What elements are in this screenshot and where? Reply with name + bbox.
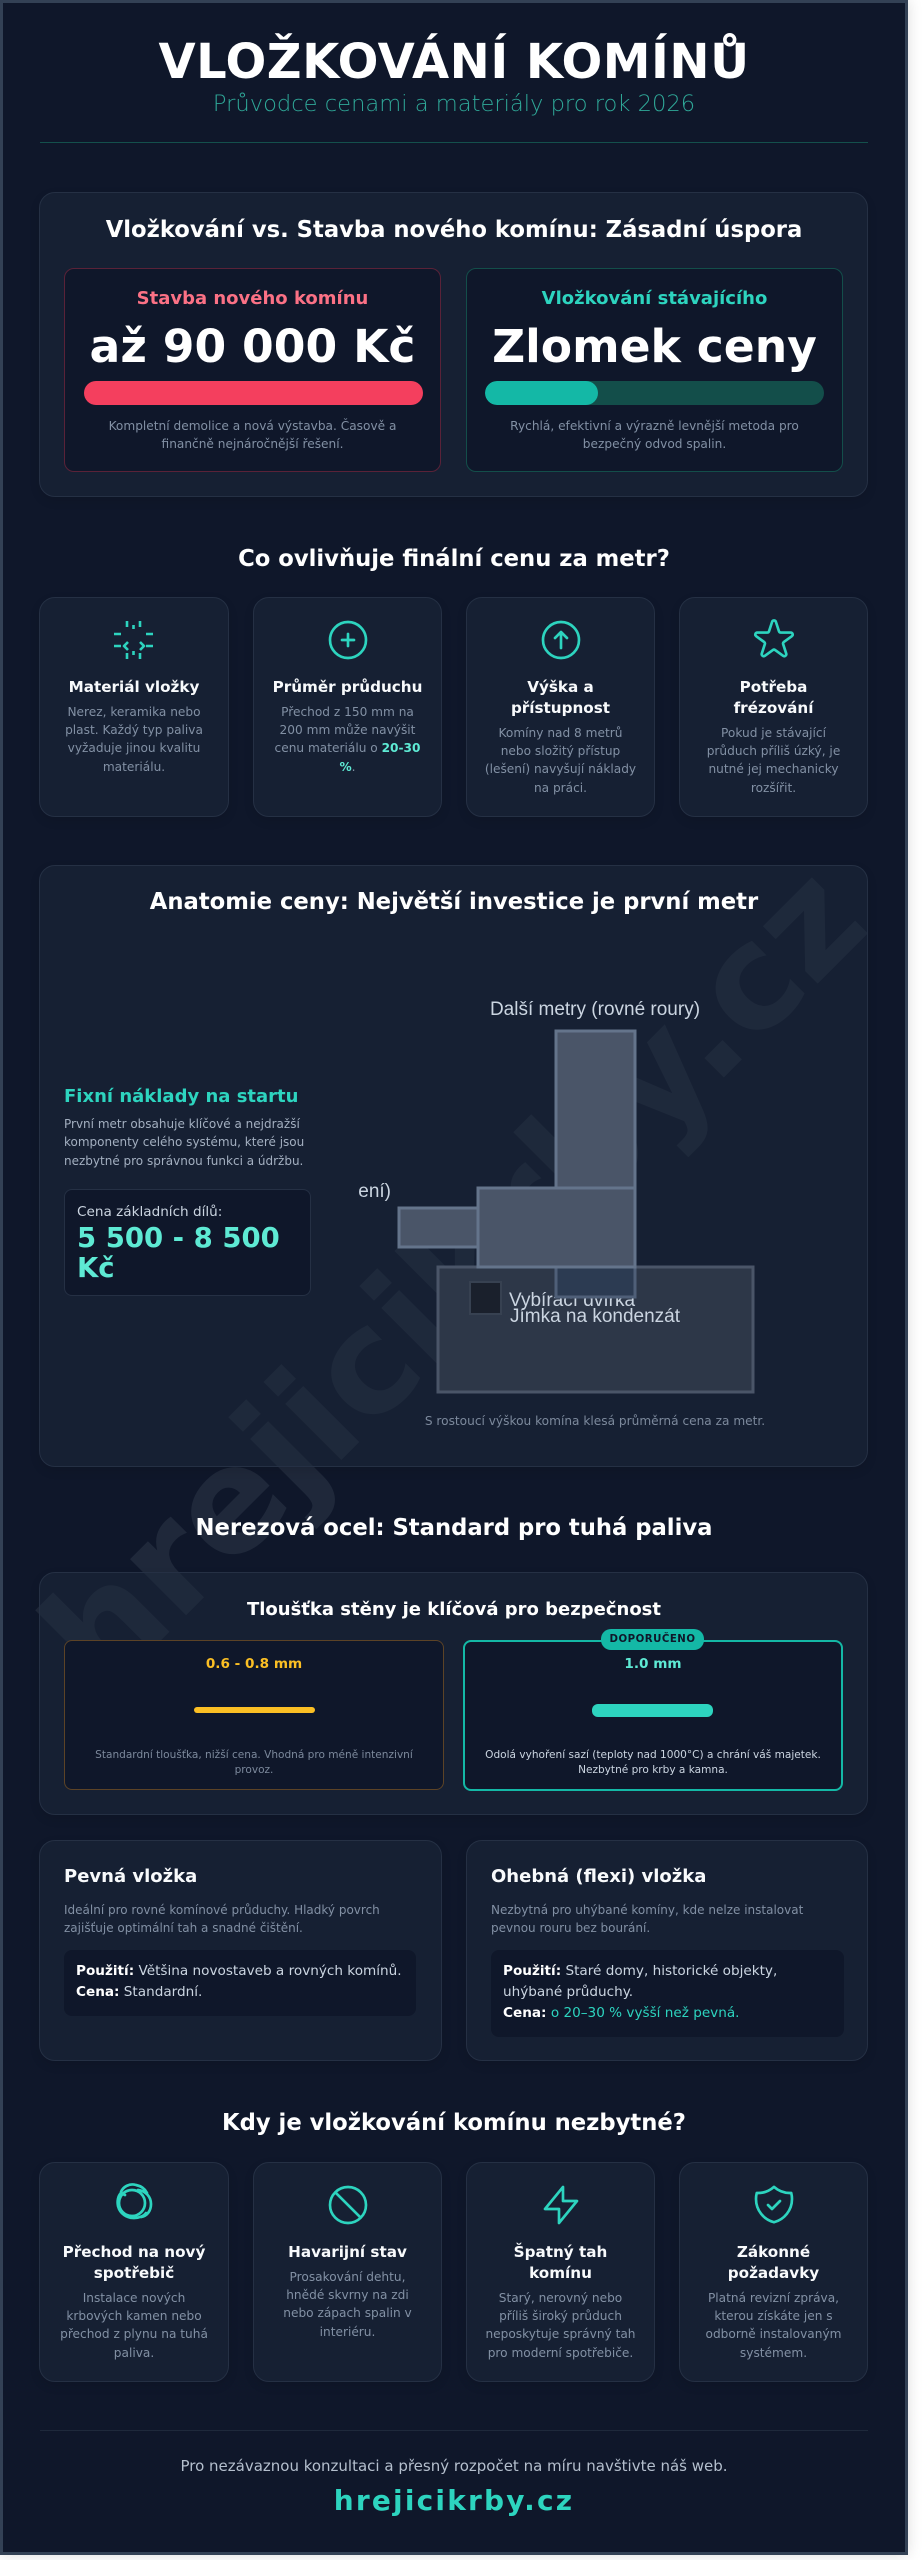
need card: legal [679,2162,868,2382]
thickness heading: Tloušťka stěny je klíčová pro bezpečnost [247,1599,661,1620]
factor card: height [466,597,655,817]
panel: comparison [39,192,868,497]
description [485,726,636,795]
description [283,2270,412,2339]
description: cenu materiálu o 20-30 [275,741,420,755]
card: lining [466,268,843,472]
usage text: Použití: Staré domy, historické objekty, [503,1963,777,1979]
badge: recommended: DOPORUČENO [610,1634,695,1645]
liner title: Pevná vložka [64,1866,197,1887]
thickness bar [194,1707,315,1713]
title [511,678,610,717]
usage text: uhýbané průduchy. [503,1984,633,2000]
description: finančně nejnáročnější řešení. [162,437,343,451]
factor card: diameter [253,597,442,817]
cleaning door [470,1282,501,1314]
title: Zákonné [737,2243,810,2261]
description: %. [339,760,356,774]
description: hnědé skvrny na zdi [286,2288,409,2302]
description [60,2291,208,2360]
description: nebo složitý přístup [501,744,620,758]
description: přechod z plynu na tuhá [60,2327,208,2341]
fixed costs text [64,1117,304,1168]
description: kterou získáte jen s [714,2309,833,2323]
description: Odolá vyhoření sazí (teploty nad 1000°C) a chrání váš majetek. [485,1749,821,1761]
icon: ban [328,2186,368,2224]
description [485,1749,821,1776]
thickness bar [592,1704,713,1717]
description [707,726,840,795]
footer text: Pro nezávaznou konzultaci a přesný rozpočet na míru navštivte náš web. [180,2457,728,2475]
description: průduch příliš úzký, je [707,744,840,758]
description: neposkytuje správný tah [485,2327,636,2341]
price: až 90 000 Kč [90,320,415,373]
title: Potřeba [740,678,807,696]
label: condensate tank: Jímka na kondenzát [510,1306,681,1327]
description: paliva. [114,2346,154,2360]
usage text: Cena: Standardní. [76,1984,202,2000]
tee piece [478,1188,635,1267]
factor card: milling [679,597,868,817]
anatomy heading: Anatomie ceny: Největší investice je první metr [150,889,758,915]
comparison heading: Vložkování vs. Stavba nového komínu: Zásadní úspora [106,217,802,243]
title: Havarijní stav [288,2243,407,2261]
icon: bolt [544,2186,578,2224]
icon: shield check [754,2186,794,2224]
card heading: Stavba nového komínu [137,288,368,309]
description: Platná revizní zpráva, [708,2291,839,2305]
description: Přechod z 150 mm na [281,705,414,719]
chimney diagram [359,999,754,1394]
description [95,1749,413,1776]
description: příliš široký průduch [499,2309,622,2323]
fixed costs text: nezbytné pro správnou funkci a údržbu. [64,1154,303,1168]
price label: Cena základních dílů: [77,1204,222,1220]
title: Špatný tah [514,2243,607,2261]
usage box [491,1950,844,2037]
description: na práci. [534,781,587,795]
description [109,418,396,451]
description: provoz. [235,1764,273,1776]
description: materiálu. [103,760,165,774]
price value [77,1222,280,1284]
factor card: material [39,597,229,817]
side connector [399,1208,478,1247]
description [510,419,799,451]
description: bezpečný odvod spalin. [583,437,726,451]
description: vyžaduje jinou kvalitu [68,741,200,755]
need card: emergency [253,2162,442,2382]
subtitle: Průvodce cenami a materiály pro rok 2026 [213,91,695,117]
title [734,678,814,717]
label: clipped connection: ení) [359,1181,391,1202]
description: plast. Každý typ paliva [65,723,203,737]
title: požadavky [728,2264,819,2282]
panel: rigid liner [39,1840,442,2061]
price value: 5 500 - 8 500 [77,1222,280,1254]
badge: recommended [601,1629,704,1650]
label: further metres: Další metry (rovné roury) [490,999,700,1020]
description [275,705,420,774]
liner description [491,1903,804,1935]
icon: material [114,621,153,659]
usage box [64,1950,416,2016]
title: komínu [529,2264,592,2282]
icon: star [754,619,794,658]
description: Nerez, keramika nebo [67,705,201,719]
price value: Kč [77,1252,115,1284]
title: Průměr průduchu [273,678,422,696]
panel: flexible liner [466,1840,868,2061]
description: Rychlá, efektivní a výrazně levnější metoda pro [510,419,799,433]
description [706,2291,841,2360]
liner description: Nezbytná pro uhýbané komíny, kde nelze instalovat [491,1903,803,1917]
usage text: Použití: Většina novostaveb a rovných komínů. [76,1963,402,1979]
description: Pokud je stávající [721,726,826,740]
description: nutné jej mechanicky [708,762,839,776]
description: 200 mm může navýšit [280,723,415,737]
title [514,2242,607,2282]
description: Nezbytné pro krby a kamna. [578,1764,728,1776]
need card: poor draught [466,2162,655,2382]
card: thin wall [64,1640,444,1790]
usage text [76,1963,402,2000]
description: Starý, nerovný nebo [499,2291,622,2305]
price: Zlomek ceny [492,320,817,373]
description: Standardní tloušťka, nižší cena. Vhodná pro méně intenzivní [95,1749,413,1761]
description: (lešení) navyšují náklady [485,762,636,776]
title [728,2243,819,2282]
fixed costs text: První metr obsahuje klíčové a nejdražší [64,1117,300,1131]
liner description [64,1903,380,1935]
description: Komíny nad 8 metrů [499,726,622,740]
panel: price anatomy [39,865,868,1467]
title: přístupnost [511,699,610,717]
fixed costs text: komponenty celého systému, které jsou [64,1135,304,1149]
icon: arrow up circle [542,620,580,660]
description: odborně instalovaným [706,2327,841,2341]
liner description: zajišťuje optimální tah a snadné čištění. [64,1921,303,1935]
description: Instalace nových [83,2291,185,2305]
description: systémem. [740,2346,807,2360]
section heading: stainless steel: Nerezová ocel: Standard pro tuhá paliva [196,1515,712,1541]
need card: new appliance [39,2162,229,2382]
title: frézování [734,699,813,717]
title: spotřebič [94,2264,174,2282]
title: Přechod na nový [63,2243,205,2261]
section heading: when needed: Kdy je vložkování komínu nezbytné? [222,2110,686,2136]
description: Kompletní demolice a nová výstavba. Časově a [109,419,396,433]
panel: wall thickness [39,1572,868,1815]
title: VLOŽKOVÁNÍ KOMÍNŮ [158,34,750,90]
description: nebo zápach spalin v [283,2306,412,2320]
card heading: Vložkování stávajícího [542,288,767,309]
icon: plus circle [328,620,368,660]
footer website: hrejicikrby.cz [334,2484,574,2517]
thickness value: 0.6 - 0.8 mm [206,1656,302,1672]
description: krbových kamen nebo [66,2309,202,2323]
icon: refresh [116,2183,152,2220]
label: cleaning door: Vybírací dvířka [509,1290,635,1311]
straight pipe [556,1031,635,1189]
description [65,705,203,774]
thickness value: 1.0 mm [624,1656,682,1672]
usage text [503,1963,777,2021]
condensate tank [438,1267,753,1392]
liner title: Ohebná (flexi) vložka [491,1866,706,1887]
price bar [84,381,423,405]
description: interiéru. [320,2325,375,2339]
description: Prosakování dehtu, [290,2270,405,2284]
card: new chimney [64,268,441,472]
lower pipe [556,1267,635,1297]
description: pro moderní spotřebiče. [488,2346,633,2360]
card: recommended wall [463,1640,843,1791]
title: Výška a [527,678,594,696]
liner description: Ideální pro rovné komínové průduchy. Hladký povrch [64,1903,380,1917]
description [485,2291,636,2360]
title [63,2243,206,2282]
title: Materiál vložky [69,678,199,696]
fixed costs heading: Fixní náklady na startu [64,1086,298,1107]
description: rozšířit. [751,781,796,795]
usage text: Cena: o 20–30 % vyšší než pevná. [503,2005,740,2021]
liner description: pevnou rouru bez bourání. [491,1921,650,1935]
base parts price box [64,1189,311,1296]
diagram caption: S rostoucí výškou komína klesá průměrná cena za metr. [425,1414,765,1428]
section heading: price factors: Co ovlivňuje finální cenu za metr? [238,546,670,572]
watermark: hrejicikrby.cz [10,834,898,1722]
price bar [485,381,824,405]
